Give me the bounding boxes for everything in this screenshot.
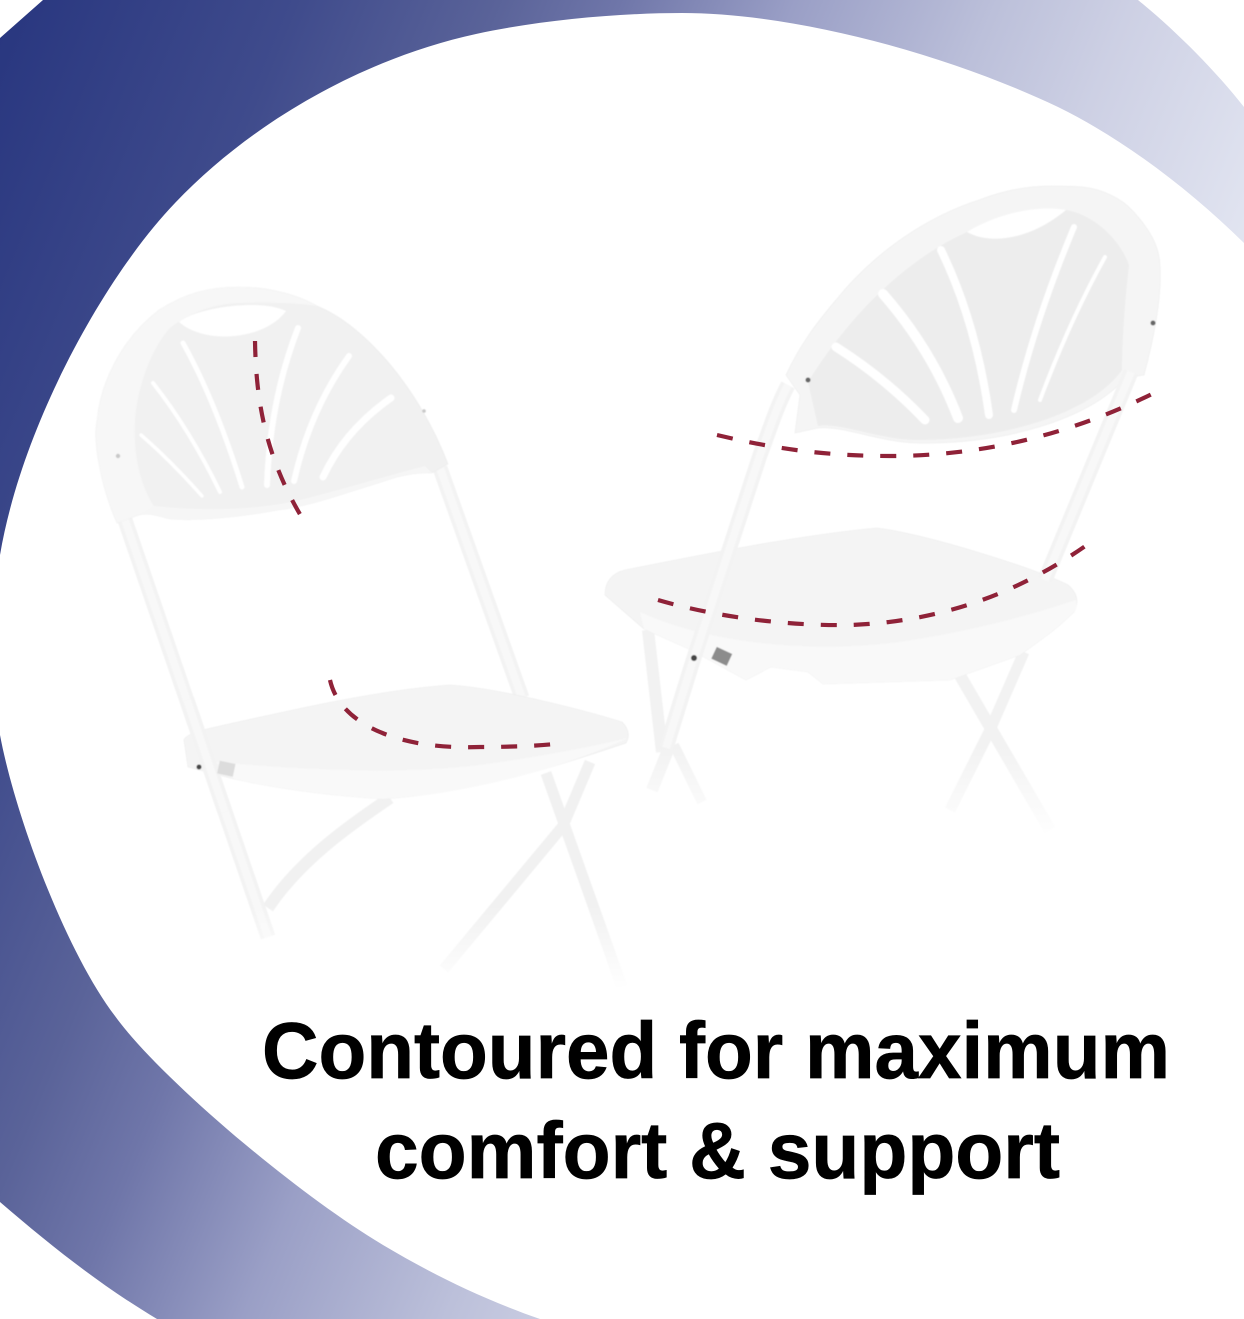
heading line 1: Contoured for maximum (262, 1006, 1170, 1095)
left chair handle cutout (179, 305, 286, 336)
contour dashes: left chair backrest (255, 341, 301, 516)
left chair screws (116, 409, 426, 458)
contour dashes: right chair backrest (717, 392, 1156, 456)
left chair backrest (96, 287, 448, 523)
left chair hinge (196, 761, 235, 777)
contour dashes: left chair seat (330, 680, 555, 747)
leg fade overlays (220, 745, 1070, 990)
right chair backrest rim (786, 186, 1160, 443)
left chair lower lip (139, 466, 432, 520)
left chair seat edge (216, 738, 628, 799)
right chair (605, 186, 1160, 830)
left chair back slots (141, 328, 391, 496)
left chair rail over seat (187, 700, 225, 812)
right chair screws (806, 320, 1156, 382)
right chair rails (666, 372, 1131, 748)
right chair seat edge (640, 600, 1077, 684)
right chair back slots (836, 227, 1105, 420)
heading line 2: comfort & support (375, 1106, 1060, 1195)
right chair hinge (691, 647, 732, 666)
left chair rim (96, 287, 317, 523)
left chair seat (184, 685, 628, 799)
right chair rear legs (648, 630, 1050, 830)
right chair backrest panel (808, 210, 1129, 440)
left chair rails (125, 468, 522, 937)
left chair (96, 287, 628, 987)
right chair seat (605, 528, 1077, 684)
left chair lower legs (268, 762, 622, 987)
heading (262, 1006, 1170, 1195)
contour dashes: right chair seat (658, 542, 1091, 625)
right chair handle cutout (967, 208, 1066, 239)
